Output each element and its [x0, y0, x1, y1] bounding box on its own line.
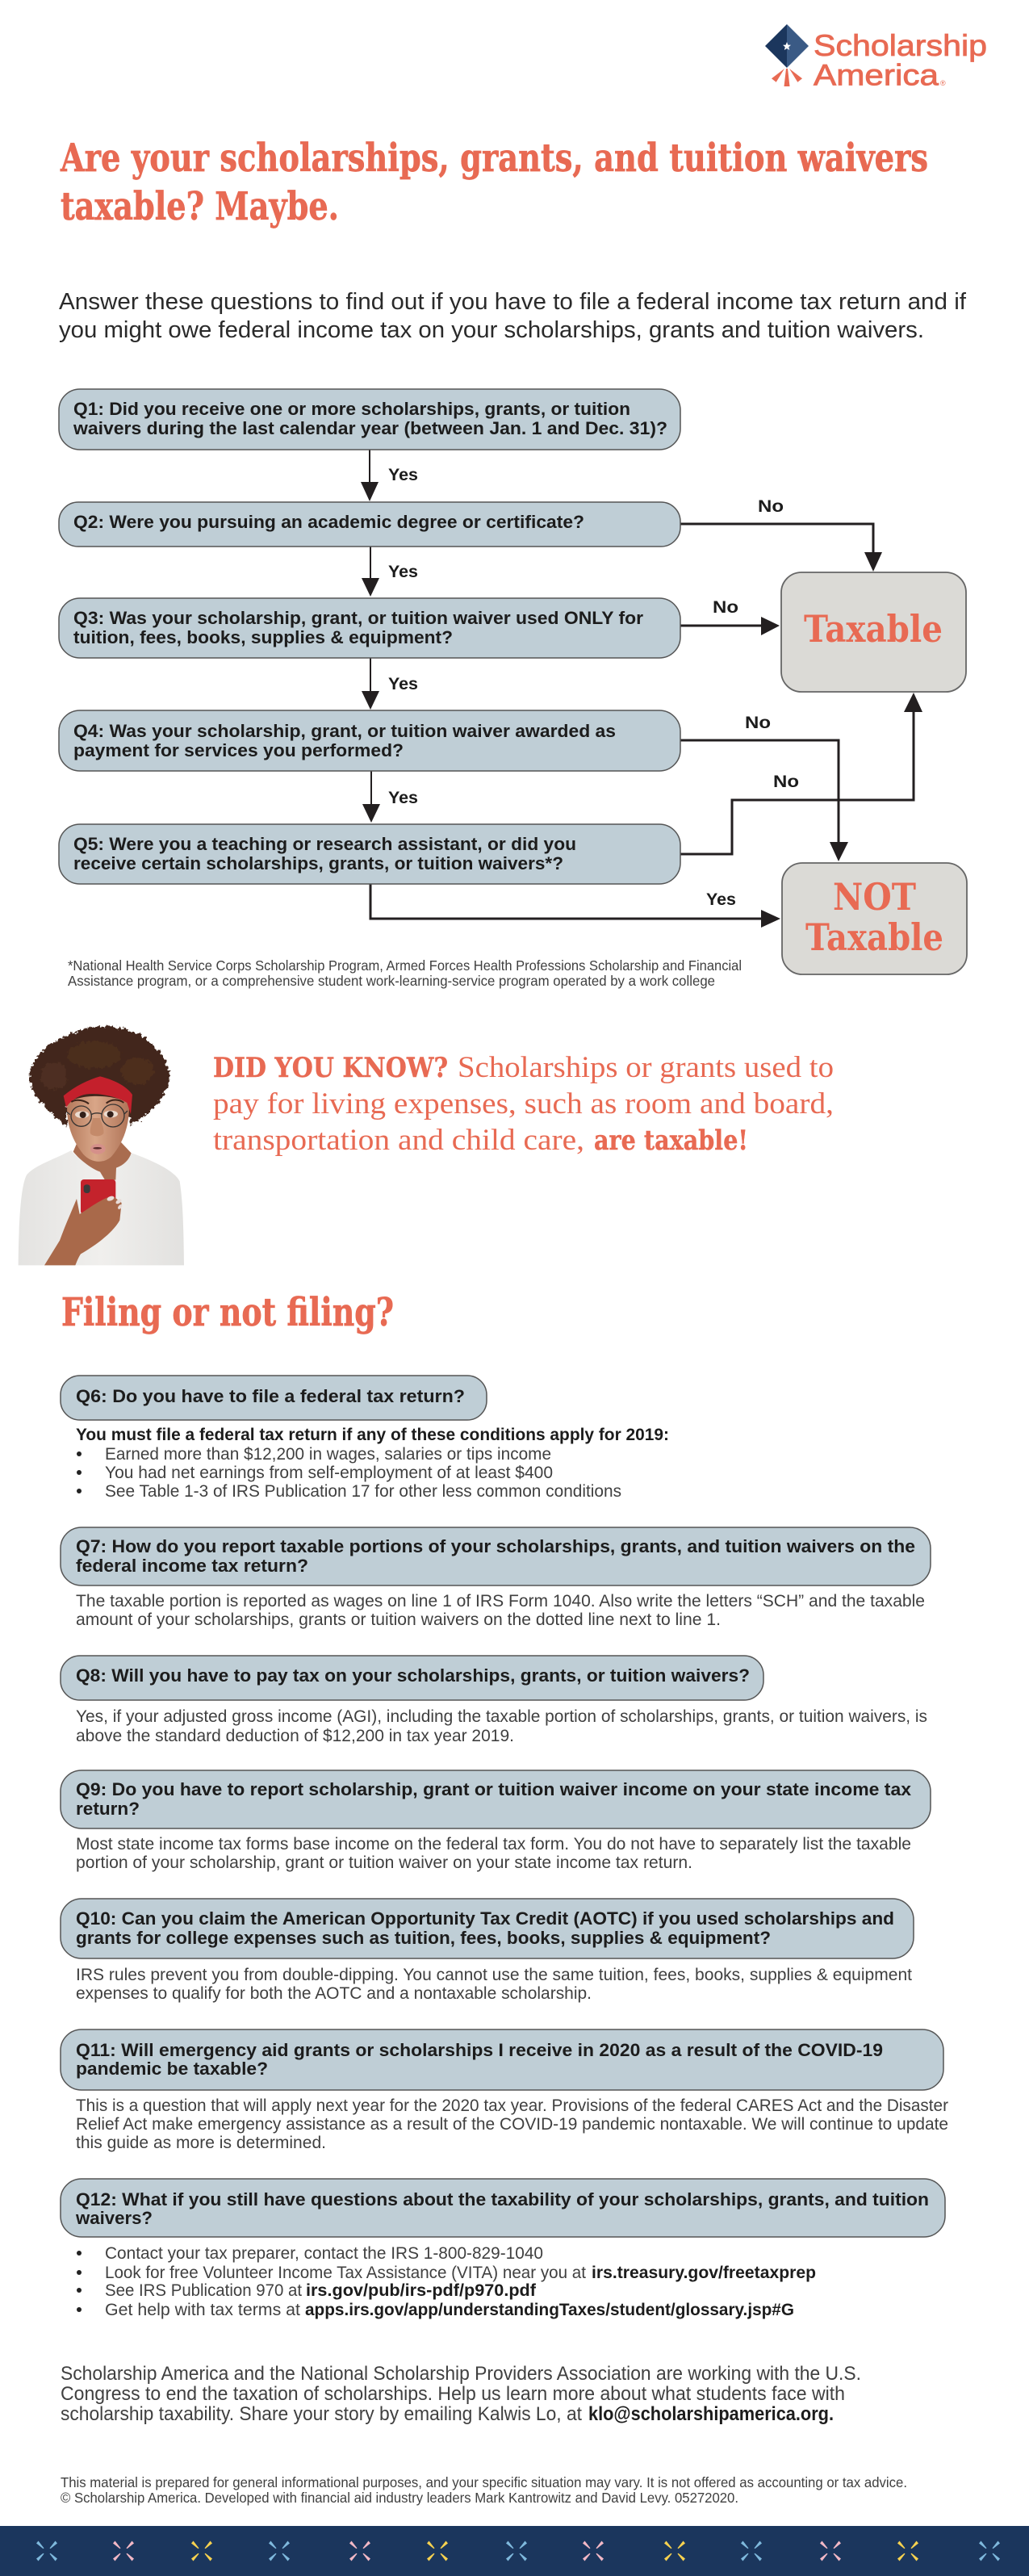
panel: Q11: [61, 2029, 948, 2152]
arrow: Q5 Yes to NOT Taxable: [370, 884, 780, 928]
panel: Q10: grants for college expenses such as tuition, fees, books, supplies & equipment?: [76, 1928, 771, 1948]
eyebrows, eyes and glasses: [67, 1100, 128, 1127]
flow labels: No: [713, 598, 738, 617]
did you know callout: transportation and child care,: [213, 1124, 584, 1157]
icon: diamond kite with star: [765, 24, 809, 86]
neck: [73, 1142, 132, 1180]
disclaimer: This material is prepared for general informational purposes, and your specific situation may vary. It is not offered as accounting or tax advice.: [61, 2474, 907, 2490]
panel: Q7: Q7: How do you report taxable portions of your scholarships, grants, and tuition waivers on the: [76, 1536, 915, 1556]
flow labels: No: [773, 773, 799, 791]
did you know callout: [213, 1051, 834, 1157]
arrow: Q2 to Q3: [362, 547, 379, 597]
arrow: Q5 No to Taxable: [680, 693, 922, 854]
did you know callout: are taxable!: [594, 1125, 748, 1157]
flow labels: Yes: [388, 563, 418, 581]
panel: Q11: Q11: Will emergency aid grants or scholarships I receive in 2020 as a result of the COVID-19: [76, 2040, 883, 2060]
closing statement: scholarship taxability. Share your story by emailing Kalwis Lo, at: [61, 2403, 582, 2425]
intro text: [59, 289, 967, 343]
flow labels: [388, 466, 799, 909]
logo wordmark: Scholarship: [814, 29, 987, 62]
arrow: Q4 to Q5: [362, 771, 380, 823]
phone camera: [84, 1184, 90, 1193]
nose: [90, 1118, 104, 1136]
logo wordmark: ®: [940, 79, 946, 87]
logo wordmark: [814, 29, 987, 92]
result box: NOT Taxable: NOT: [833, 875, 916, 919]
result box: NOT Taxable: Taxable: [805, 915, 943, 959]
question box Q2: Q2: Were you pursuing an academic degree or certificate?: [73, 512, 584, 532]
heading: Filing or not filing?: Filing or not filing?: [61, 1290, 394, 1335]
closing statement: Scholarship America and the National Scholarship Providers Association are working with the U.S.: [61, 2363, 861, 2385]
panel: Q8: above the standard deduction of $12,200 in tax year 2019.: [76, 1727, 514, 1745]
question box Q2: [59, 502, 680, 547]
face: [67, 1096, 129, 1162]
did you know callout: pay for living expenses, such as room and board,: [213, 1087, 834, 1120]
question box Q5: receive certain scholarships, grants, or tuition waivers*?: [73, 853, 563, 873]
panel: Q12: [61, 2179, 945, 2319]
panel: Q6: You had net earnings from self-employment of at least $400: [105, 1464, 553, 1482]
result box: Taxable: Taxable: [804, 607, 943, 651]
panel: Q6: Earned more than $12,200 in wages, salaries or tips income: [105, 1445, 551, 1464]
intro text: Answer these questions to find out if you have to file a federal income tax return and if: [59, 289, 967, 315]
panel: Q12: apps.irs.gov/app/understandingTaxes/student/glossary.jsp#G: [305, 2301, 794, 2319]
hand: [44, 1196, 123, 1265]
phone: [81, 1179, 115, 1214]
footer band with spark pattern: [0, 2526, 1029, 2576]
did you know callout: Scholarships or grants used to: [458, 1051, 834, 1084]
logo: Scholarship America: [765, 24, 987, 92]
flow labels: Yes: [388, 675, 418, 693]
panel: Q11: this guide as more is determined.: [76, 2134, 326, 2152]
panel: Q6: Q6: Do you have to file a federal tax return?: [76, 1386, 465, 1406]
illustration: surprised woman with phone: [19, 1026, 184, 1265]
arrow: Q4 No to NOT Taxable: [680, 740, 848, 861]
logo wordmark: America: [814, 58, 939, 92]
panel: Q9: Most state income tax forms base income on the federal tax form. You do not have to separately list the taxable: [76, 1835, 911, 1853]
arrow: Q1 to Q2: [361, 450, 379, 501]
panel: Q7: amount of your scholarships, grants or tuition waivers on the dotted line next to line 1.: [76, 1611, 721, 1629]
panel: Q9: [61, 1770, 931, 1872]
flow labels: No: [745, 714, 771, 732]
panel: Q7: [61, 1527, 931, 1629]
panel: Q10: IRS rules prevent you from double-dipping. You cannot use the same tuition, fees, books, supplies & equipment: [76, 1966, 912, 1984]
closing statement: [61, 2363, 861, 2425]
arrow: Q2 No to Taxable: [680, 524, 882, 572]
panel: Q9: return?: [76, 1799, 140, 1819]
panel: Q6: See Table 1-3 of IRS Publication 17 for other less common conditions: [105, 1482, 621, 1501]
panel: Q12: waivers?: [75, 2208, 153, 2228]
question box Q1: waivers during the last calendar year (between Jan. 1 and Dec. 31)?: [73, 418, 667, 438]
closing statement: Congress to end the taxation of scholarships. Help us learn more about what students face with: [61, 2383, 845, 2405]
panel: Q9: Q9: Do you have to report scholarship, grant or tuition waiver income on your state income tax: [76, 1779, 912, 1799]
panel: Q10: Q10: Can you claim the American Opportunity Tax Credit (AOTC) if you used scholarships and: [76, 1908, 894, 1929]
arrow: Q3 No to Taxable: [680, 617, 780, 635]
question box Q5: [59, 824, 680, 884]
flow labels: Yes: [388, 789, 418, 807]
panel: Q11: Relief Act make emergency assistance as a result of the COVID-19 pandemic nontaxable. We will continue to update: [76, 2115, 948, 2134]
panel: Q11: pandemic be taxable?: [76, 2059, 268, 2079]
question box Q1: Q1: Did you receive one or more scholarships, grants, or tuition: [73, 399, 630, 419]
flow labels: Yes: [706, 890, 736, 909]
disclaimer: [61, 2474, 907, 2506]
panel: Q12: Q12: What if you still have questions about the taxability of your scholarships, grants, and tuition: [76, 2189, 929, 2209]
arrow: Q3 to Q4: [362, 658, 379, 710]
title: taxable? Maybe.: [61, 184, 339, 229]
intro text: you might owe federal income tax on your scholarships, grants and tuition waivers.: [59, 317, 924, 343]
hair: [29, 1026, 169, 1126]
footnote: *National Health Service Corps Scholarship Program, Armed Forces Health Professions Scholarship and Financial: [68, 957, 742, 974]
panel: Q8: Q8: Will you have to pay tax on your scholarships, grants, or tuition waivers?: [76, 1665, 750, 1686]
title: [60, 136, 928, 229]
question box Q5: Q5: Were you a teaching or research assistant, or did you: [73, 834, 576, 854]
panel: Q9: portion of your scholarship, grant or tuition waiver on your state income tax return.: [76, 1853, 692, 1872]
panel: Q10: [61, 1899, 914, 2003]
question box Q3: tuition, fees, books, supplies & equipment?: [73, 627, 453, 647]
result box: Taxable: [781, 572, 966, 692]
question box Q4: Q4: Was your scholarship, grant, or tuition waiver awarded as: [73, 721, 616, 741]
disclaimer: © Scholarship America. Developed with financial aid industry leaders Mark Kantrowitz and David Levy. 05272020.: [61, 2490, 738, 2506]
panel: Q12: Get help with tax terms at: [105, 2301, 300, 2319]
panel: Q11: This is a question that will apply next year for the 2020 tax year. Provisions of the federal CARES Act and the Disaster: [76, 2096, 948, 2115]
panel: Q7: federal income tax return?: [76, 1556, 308, 1576]
panel: Q8: Yes, if your adjusted gross income (AGI), including the taxable portion of scholarships, grants, or tuition waivers, is: [76, 1707, 927, 1726]
flowchart: [59, 389, 967, 989]
panel: Q12: Look for free Volunteer Income Tax Assistance (VITA) near you at: [105, 2264, 586, 2282]
panel: Q10: expenses to qualify for both the AOTC and a nontaxable scholarship.: [76, 1984, 592, 2003]
panel: Q12: irs.treasury.gov/freetaxprep: [592, 2264, 816, 2282]
question box Q4: [59, 710, 680, 771]
panel: Q7: The taxable portion is reported as wages on line 1 of IRS Form 1040. Also write the letters “SCH” and the taxable: [76, 1592, 925, 1611]
question box Q1: [59, 389, 680, 450]
panel: Q12: Contact your tax preparer, contact the IRS 1-800-829-1040: [105, 2244, 543, 2263]
question box Q3: [59, 598, 680, 658]
did you know callout: DID YOU KNOW?: [213, 1052, 448, 1084]
panel: Q12: See IRS Publication 970 at: [105, 2281, 302, 2300]
footnote: [68, 957, 742, 989]
panel: Q6: [61, 1376, 669, 1501]
panel: Q12: irs.gov/pub/irs-pdf/p970.pdf: [306, 2281, 537, 2300]
question box Q4: payment for services you performed?: [73, 740, 404, 760]
headband: [64, 1076, 132, 1114]
flow labels: Yes: [388, 466, 418, 484]
shirt: [19, 1150, 184, 1265]
question box Q3: Q3: Was your scholarship, grant, or tuition waiver used ONLY for: [73, 608, 643, 628]
footnote: Assistance program, or a comprehensive student work-learning-service program operated by a work college: [68, 973, 715, 989]
result box: NOT Taxable: [782, 863, 967, 974]
mouth: [90, 1144, 106, 1154]
panel: Q6: You must file a federal tax return if any of these conditions apply for 2019:: [76, 1426, 669, 1444]
flow labels: No: [758, 497, 784, 516]
closing statement: klo@scholarshipamerica.org.: [588, 2403, 834, 2425]
panel: Q8: [61, 1656, 927, 1745]
